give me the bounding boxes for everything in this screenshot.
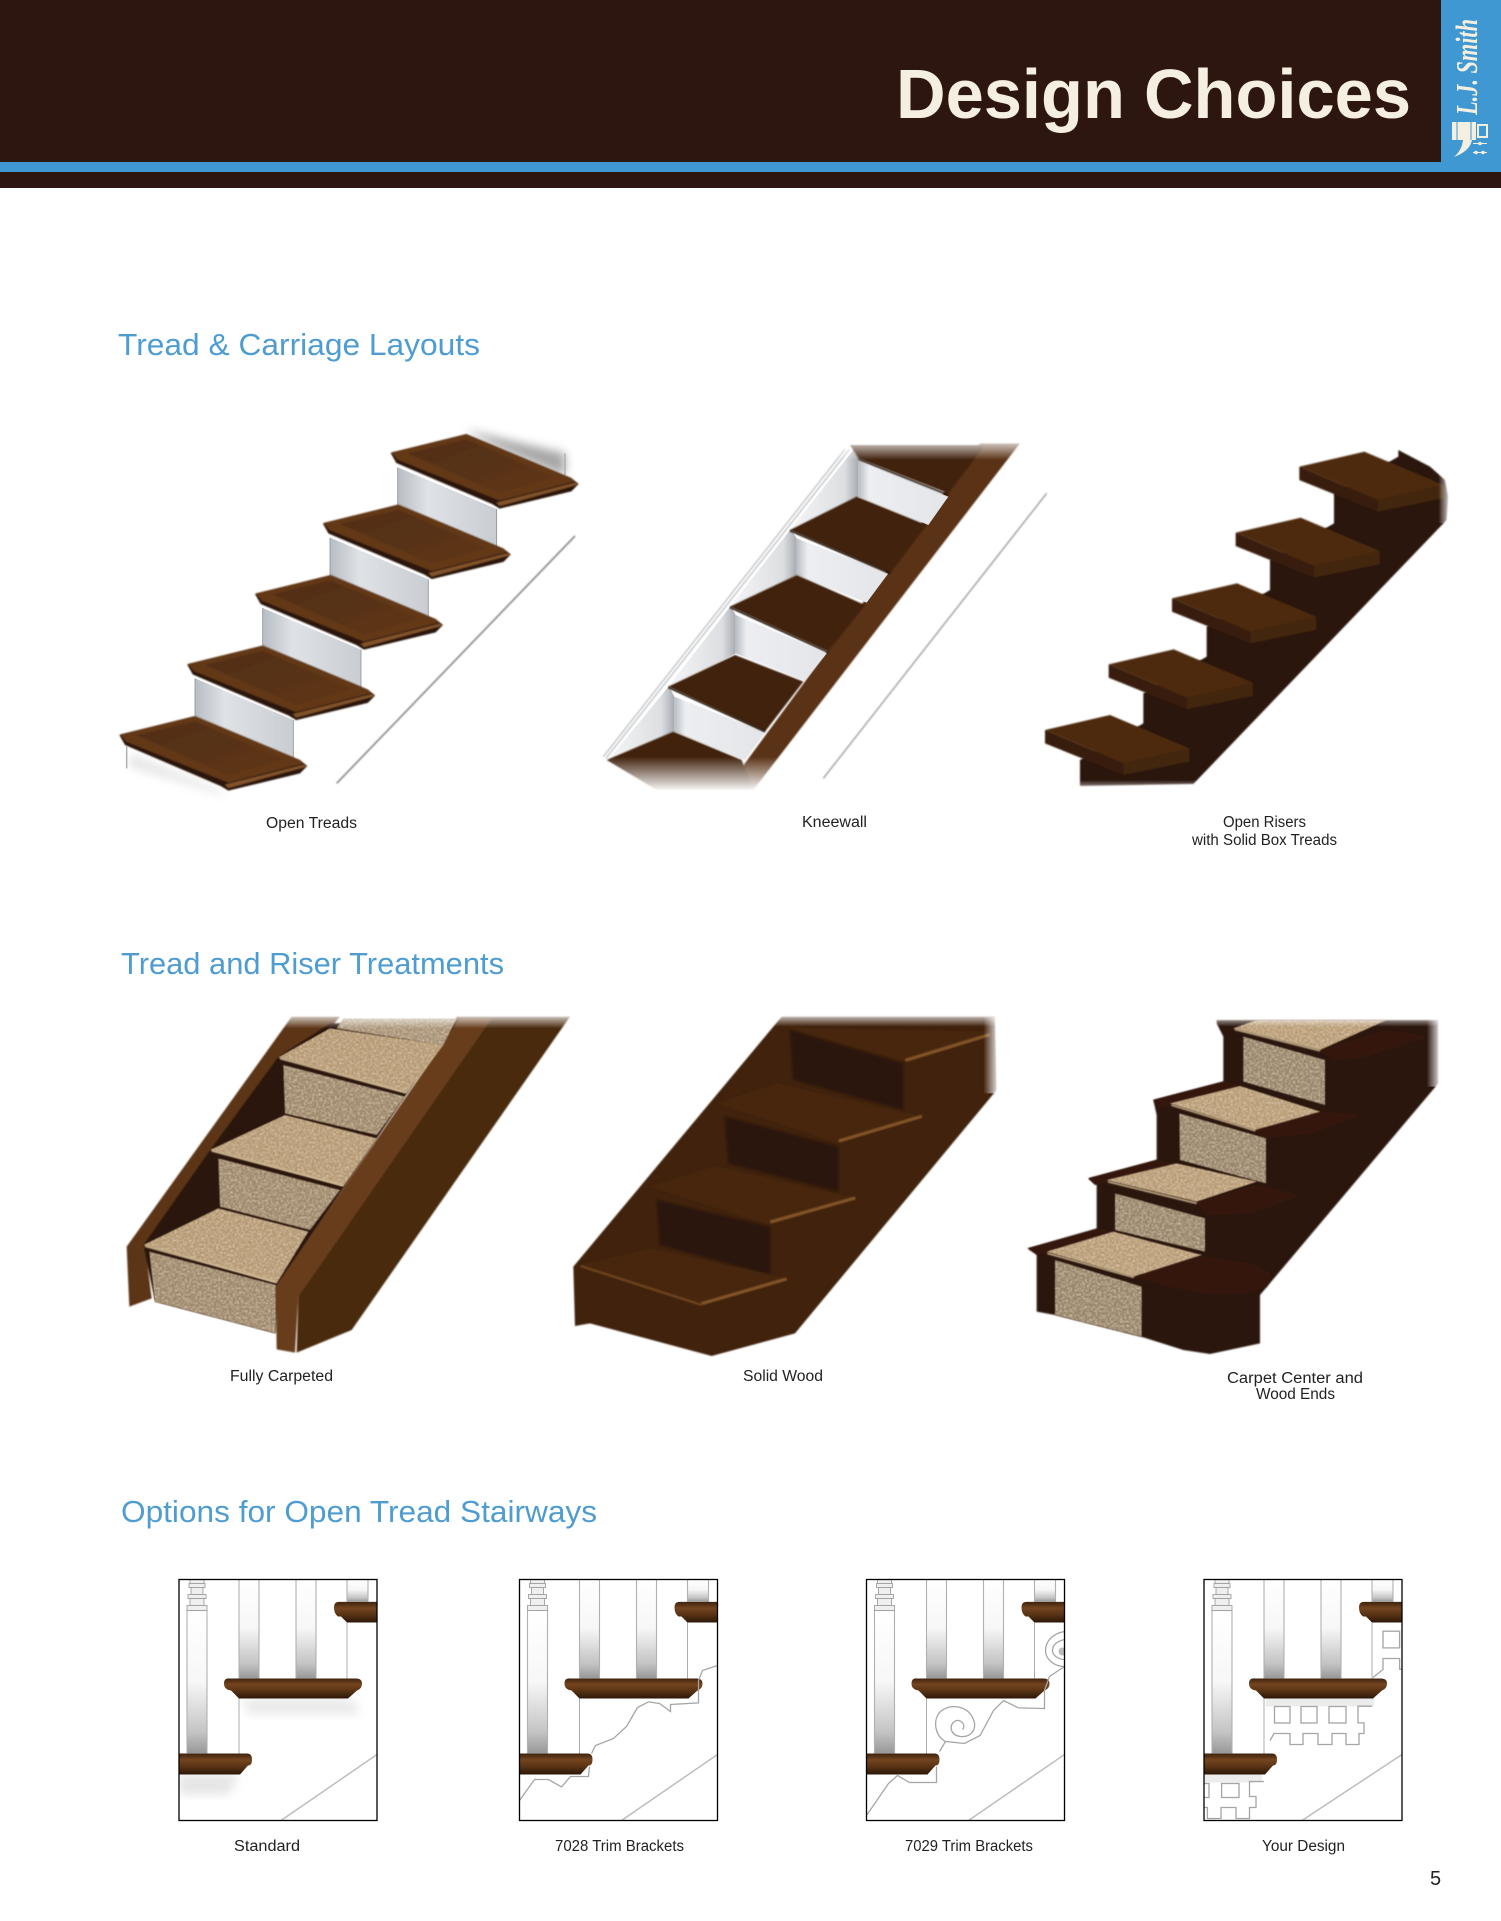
header banner [0,0,1501,188]
heading: tread and carriage layouts: Tread & Carriage Layouts [118,327,480,362]
caption: 7028: 7028 Trim Brackets [555,1838,684,1855]
stair: carpet center and wood ends [1027,1013,1450,1354]
stair: fully carpeted [127,1012,577,1353]
stair: open treads [119,430,579,795]
option: 7028 trim brackets [520,1578,718,1820]
page number: 5 [1430,1868,1441,1890]
caption: kneewall: Kneewall [802,814,867,831]
heading: tread and riser treatments: Tread and Riser Treatments [121,946,504,981]
option: 7029 trim brackets [866,1578,1066,1820]
caption: open risers [1191,814,1337,849]
caption: fully carpeted: Fully Carpeted [230,1368,333,1385]
stair: open risers with solid box treads [1045,450,1452,790]
caption: open risers: with Solid Box Treads [1191,832,1337,849]
option: standard [179,1578,377,1820]
caption: standard: Standard [234,1838,300,1855]
caption: open treads: Open Treads [266,815,357,832]
caption: your design: Your Design [1262,1838,1345,1855]
caption: carpet center: Carpet Center and [1227,1370,1363,1387]
caption: 7029: 7029 Trim Brackets [905,1838,1033,1855]
stair: solid wood [573,1012,1007,1356]
caption: solid wood: Solid Wood [743,1368,823,1385]
option: your design [1200,1578,1402,1820]
caption: carpet center [1227,1370,1363,1403]
stair: kneewall [597,437,1047,792]
heading: options for open tread stairways: Options for Open Tread Stairways [121,1494,597,1529]
caption: open risers: Open Risers [1223,814,1306,831]
caption: carpet center: Wood Ends [1256,1386,1335,1403]
title: Design Choices [896,55,1411,133]
logo tab [1441,0,1501,172]
